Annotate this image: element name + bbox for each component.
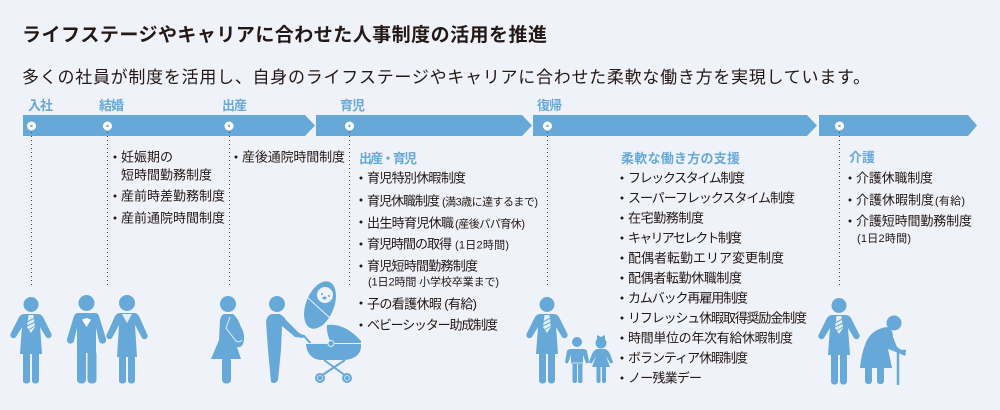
list: flexible work support: ボランティア休暇制度 xyxy=(628,350,748,366)
list: childcare: (産後パパ育休) xyxy=(455,216,525,230)
list: flexible work support: 時間単位の年次有給休暇制度 xyxy=(628,330,793,346)
list: childcare: 育児短時間勤務制度 xyxy=(367,258,478,274)
list: childcare: (1日2時間) xyxy=(455,238,509,252)
title: ライフステージやキャリアに合わせた人事制度の活用を推進 xyxy=(22,24,547,46)
stroller xyxy=(306,325,361,383)
timeline stage labels: 入社 xyxy=(28,98,53,113)
list: nursing care: 介護休暇制度 xyxy=(856,192,934,208)
icon: girl xyxy=(589,335,613,383)
icon: employee xyxy=(10,297,52,384)
subtitle text: 多くの社員が制度を活用し、自身のライフステージやキャリアに合わせた柔軟な働き方を実現しています。 xyxy=(22,68,870,87)
list: flexible work support: カムバック再雇用制度 xyxy=(628,290,748,306)
list: childcare: ベビーシッター助成制度 xyxy=(367,318,498,332)
list: flexible work support: 配偶者転勤休職制度 xyxy=(628,270,742,286)
list: childcare: (1日2時間 小学校卒業まで) xyxy=(368,274,499,288)
timeline markers xyxy=(27,122,844,130)
list: birth: 産後通院時間制度 xyxy=(242,150,345,164)
list: nursing care: 介護短時間勤務制度 xyxy=(856,214,972,228)
list: flexible work support: 柔軟な働き方の支援 xyxy=(621,151,740,166)
icon: returning mother xyxy=(526,297,568,384)
baby xyxy=(298,277,342,333)
list: flexible work support: リフレッシュ休暇取得奨励金制度 xyxy=(628,310,807,326)
dotted stage lines xyxy=(32,132,840,288)
list: childcare: 出産・育児 xyxy=(359,151,417,166)
list: flexible work support: ノー残業デー xyxy=(628,370,702,386)
icon: groom xyxy=(67,295,106,384)
list: nursing care xyxy=(848,150,972,245)
timeline stage labels: 出産 xyxy=(222,98,247,113)
icon: father with stroller and baby xyxy=(266,277,361,383)
list: marriage: 産前通院時間制度 xyxy=(121,210,225,226)
list: flexible work support: 配偶者転勤エリア変更制度 xyxy=(628,250,784,266)
timeline stage labels xyxy=(28,98,562,113)
icon: boy xyxy=(565,337,589,383)
icon: pregnant woman xyxy=(211,296,244,384)
list: flexible work support xyxy=(620,151,807,386)
list: marriage: 産前時差勤務制度 xyxy=(121,188,225,204)
list: nursing care: (1日2時間) xyxy=(857,232,911,245)
timeline arrow bar xyxy=(23,115,977,136)
list: marriage xyxy=(114,150,225,226)
list: marriage: 短時間勤務制度 xyxy=(121,168,212,182)
list: childcare xyxy=(359,151,538,332)
timeline stage labels: 育児 xyxy=(340,98,365,113)
list: marriage: 妊娠期の xyxy=(121,150,173,164)
list: childcare: 子の看護休暇 (有給) xyxy=(367,296,477,312)
list: nursing care: 介護休職制度 xyxy=(856,170,933,186)
list: childcare: 出生時育児休職 xyxy=(367,216,454,230)
timeline stage labels: 復帰 xyxy=(537,98,562,113)
icon: elderly person with cane xyxy=(860,316,906,385)
list: childcare: 育児休職制度 xyxy=(367,194,440,208)
list: flexible work support: キャリアセレクト制度 xyxy=(628,230,742,246)
list: childcare: 育児時間の取得 xyxy=(367,236,452,252)
list: flexible work support: フレックスタイム制度 xyxy=(628,170,745,186)
icon: caregiver xyxy=(818,298,860,384)
list: nursing care: (有給) xyxy=(935,194,965,208)
list: childcare: (満3歳に達するまで) xyxy=(442,196,538,208)
list: nursing care: 介護 xyxy=(849,150,875,165)
list: childcare: 育児特別休暇制度 xyxy=(367,170,466,186)
icon: bride xyxy=(106,295,148,384)
list: flexible work support: スーパーフレックスタイム制度 xyxy=(628,190,795,206)
list: flexible work support: 在宅勤務制度 xyxy=(628,210,704,226)
timeline stage labels: 結婚 xyxy=(99,98,124,113)
